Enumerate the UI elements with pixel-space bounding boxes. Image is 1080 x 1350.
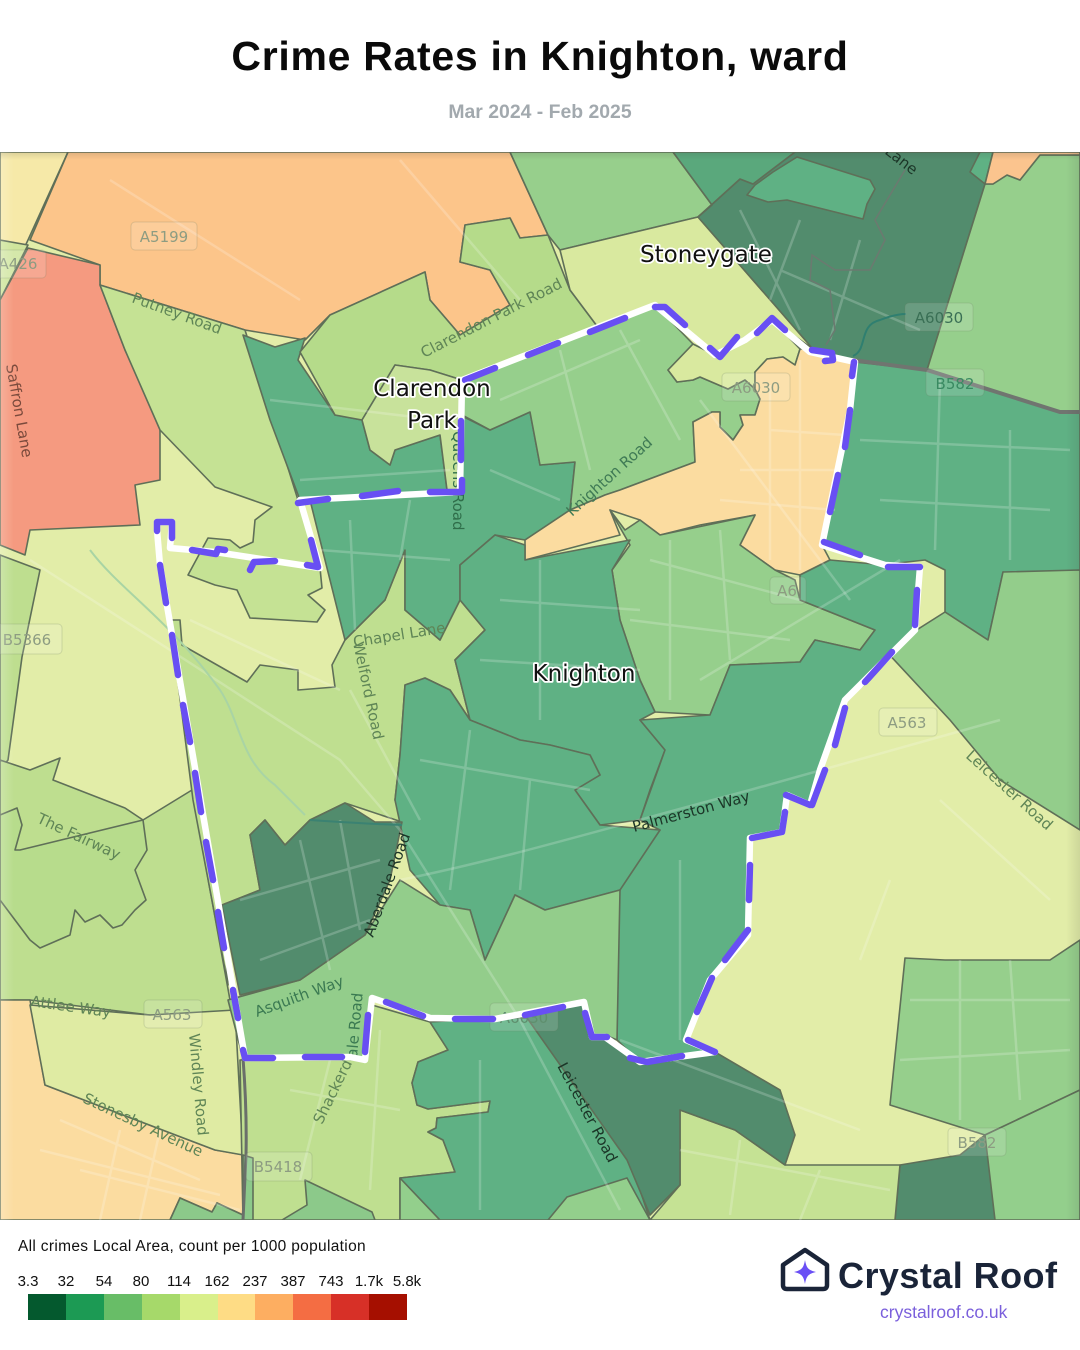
map: [0, 152, 1080, 1220]
map road labels: B582: [958, 1134, 996, 1152]
map road labels: Attlee Way: [29, 992, 112, 1021]
map road labels: Leicester Road: [553, 1059, 621, 1165]
map road labels: Windley Road: [185, 1033, 212, 1136]
map road labels: Asquith Way: [252, 972, 346, 1021]
legend scale labels: 114: [167, 1273, 191, 1290]
rivers and railway: [90, 170, 1080, 1220]
road number shields: [0, 222, 1006, 1181]
map road labels: Putney Road: [130, 289, 224, 338]
legend scale labels: 387: [280, 1273, 306, 1290]
map road labels: A563: [153, 1006, 191, 1024]
map road labels: B5418: [254, 1158, 302, 1176]
legend scale labels: 1.7k: [355, 1273, 384, 1290]
map road labels: A563: [888, 714, 926, 732]
subtitle: date range: Mar 2024 - Feb 2025: [448, 101, 632, 123]
map road labels: A5199: [140, 228, 188, 246]
place labels: [373, 242, 772, 687]
roads and street lines: [30, 160, 1070, 1220]
map road labels: Shackerd: [309, 1057, 356, 1127]
legend scale labels: 80: [133, 1273, 149, 1290]
title: Crime Rates in Knighton, ward: [231, 33, 849, 79]
legend scale labels: 237: [242, 1273, 268, 1290]
map road labels: Queens Road: [449, 431, 467, 530]
map road labels: A6030: [915, 309, 963, 327]
map road labels: Aberdale Road: [360, 830, 414, 939]
map road labels: Clarendon Park Road: [418, 275, 565, 362]
map road labels: Stonesby Avenue: [80, 1089, 206, 1161]
place labels: Knighton: [533, 661, 635, 687]
map road labels: A6030: [500, 1009, 548, 1027]
legend scale labels: 5.8k: [393, 1273, 422, 1290]
place labels: Clarendon: [373, 376, 491, 402]
place labels: Stoneygate: [640, 242, 772, 268]
map road labels: The Fairway: [33, 809, 123, 864]
map road labels: A6030: [732, 379, 780, 397]
legend scale labels: 162: [204, 1273, 230, 1290]
map road labels: Leicester Road: [962, 747, 1056, 834]
map road labels: B582: [936, 375, 974, 393]
legend scale labels: 743: [318, 1273, 344, 1290]
map road labels: ale Road: [343, 992, 367, 1058]
place labels: Park: [407, 408, 458, 434]
brand name: Crystal Roof: [838, 1255, 1057, 1296]
legend title: All crimes Local Area, count per 1000 population: [18, 1238, 366, 1255]
legend scale labels: 54: [96, 1273, 112, 1290]
legend scale labels: 3.3: [18, 1273, 38, 1290]
map road labels: Lane: [882, 142, 921, 178]
map road labels: Palmerston Way: [630, 787, 752, 836]
map road labels: B5366: [3, 631, 51, 649]
map road labels: [0, 142, 1056, 1176]
ward boundary: [157, 305, 920, 1062]
choropleth neighbourhood areas: [0, 152, 1080, 1220]
legend scale labels: [18, 1273, 422, 1290]
map road labels: Saffron Lane: [2, 363, 36, 459]
map road labels: A6: [777, 582, 797, 600]
ward interior: [170, 550, 485, 985]
map road labels: Knighton Road: [563, 433, 656, 520]
map road labels: Chapel Lane: [352, 619, 447, 651]
map road labels: Welford Road: [349, 640, 387, 741]
legend scale labels: 32: [58, 1273, 74, 1290]
website: crystalroof.co.uk: [880, 1302, 1007, 1322]
legend colour scale: [28, 1294, 407, 1320]
icon: Crystal Roof house logo: [780, 1248, 830, 1292]
